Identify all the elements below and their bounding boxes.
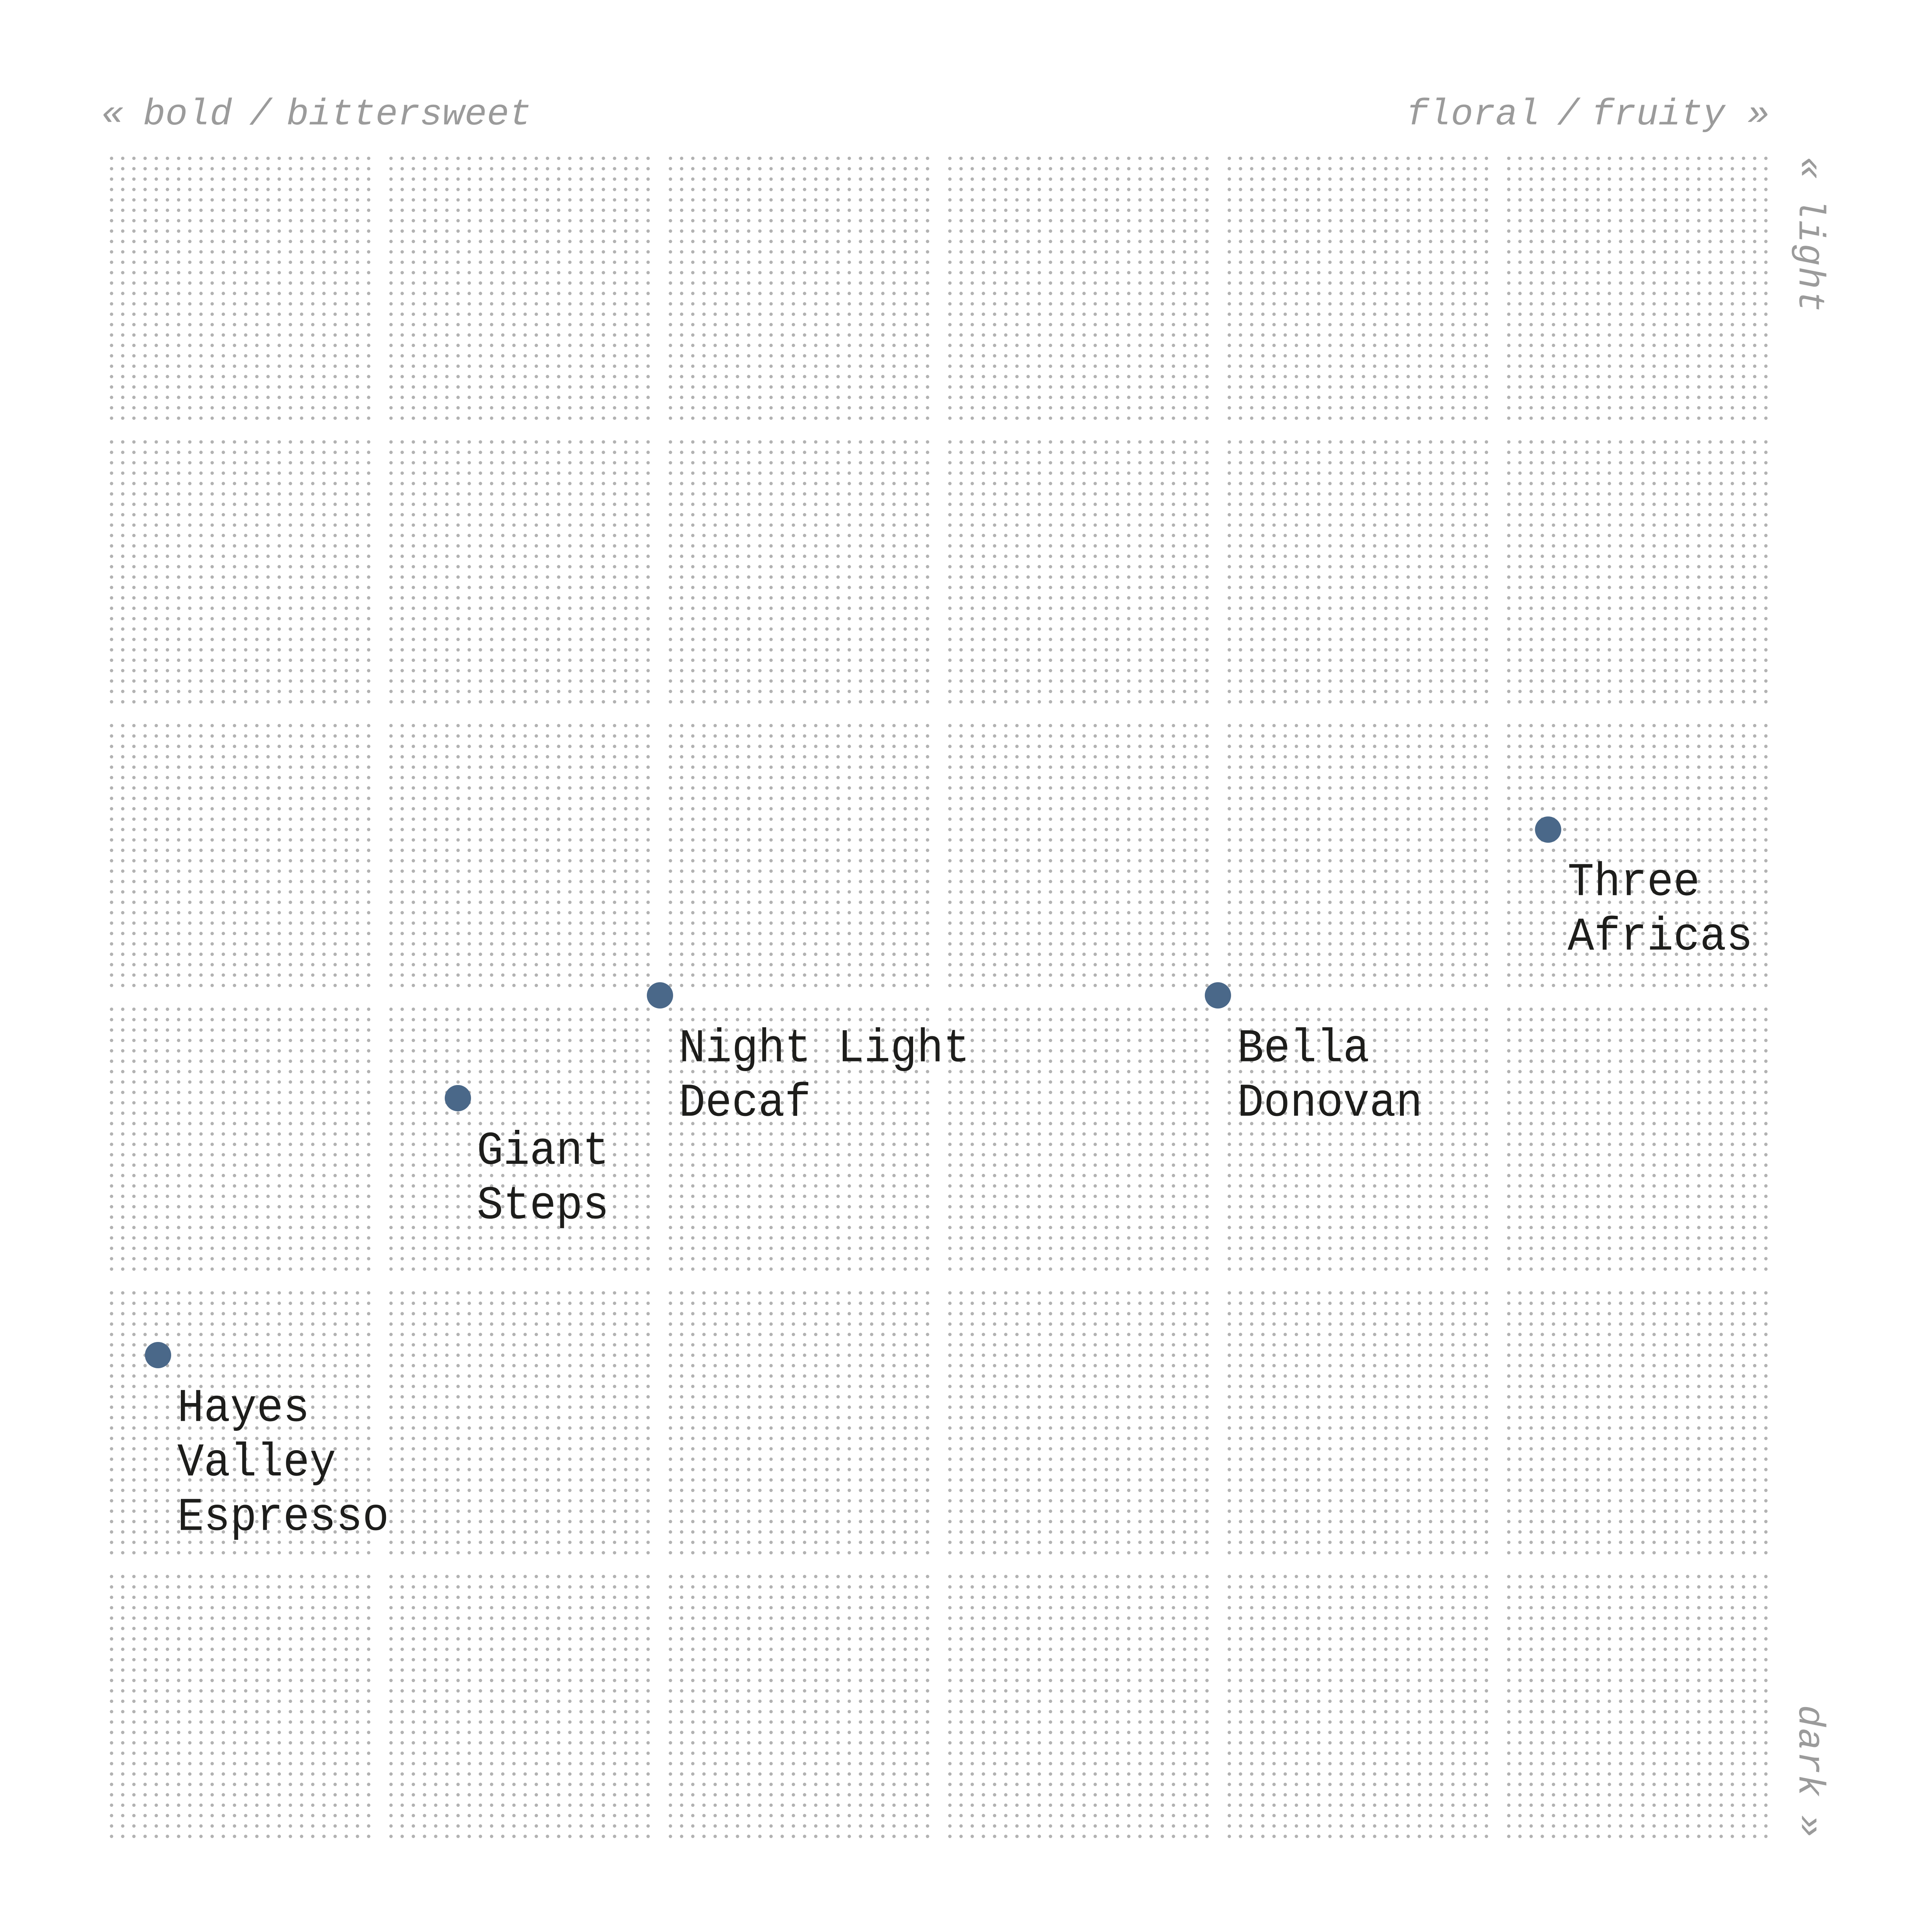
data point: Hayes Valley Espresso bbox=[145, 1342, 389, 1544]
marker: Night Light Decaf bbox=[647, 982, 673, 1009]
label: Hayes Valley Espresso: Hayes bbox=[177, 1382, 310, 1435]
label: Three Africas: Africas bbox=[1568, 911, 1753, 964]
label: Three Africas: Three bbox=[1568, 856, 1700, 910]
label: Hayes Valley Espresso: Valley bbox=[177, 1437, 336, 1490]
marker: Three Africas bbox=[1535, 816, 1561, 843]
label: Night Light Decaf: Night Light bbox=[679, 1022, 970, 1076]
label: Bella Donovan: Donovan bbox=[1237, 1077, 1422, 1130]
label: Giant Steps: Giant bbox=[477, 1125, 609, 1178]
label: Hayes Valley Espresso: Espresso bbox=[177, 1491, 389, 1544]
axis label: floral / fruity: floral / fruity » bbox=[1406, 94, 1770, 136]
data point: Bella Donovan bbox=[1205, 982, 1422, 1130]
marker: Giant Steps bbox=[445, 1085, 471, 1111]
axis label: bold / bittersweet: « bold / bittersweet bbox=[101, 94, 531, 136]
axis label: light: « light bbox=[1788, 156, 1830, 313]
axis label: dark: dark » bbox=[1788, 1705, 1830, 1838]
data point: Giant Steps bbox=[445, 1085, 609, 1233]
label: Night Light Decaf: Decaf bbox=[679, 1077, 811, 1130]
data point: Night Light Decaf bbox=[647, 982, 970, 1130]
marker: Bella Donovan bbox=[1205, 982, 1231, 1009]
dot grid background bbox=[110, 156, 1767, 1838]
data point: Three Africas bbox=[1535, 816, 1753, 964]
label: Giant Steps: Steps bbox=[477, 1180, 609, 1233]
label: Bella Donovan: Bella bbox=[1237, 1022, 1369, 1076]
marker: Hayes Valley Espresso bbox=[145, 1342, 171, 1368]
